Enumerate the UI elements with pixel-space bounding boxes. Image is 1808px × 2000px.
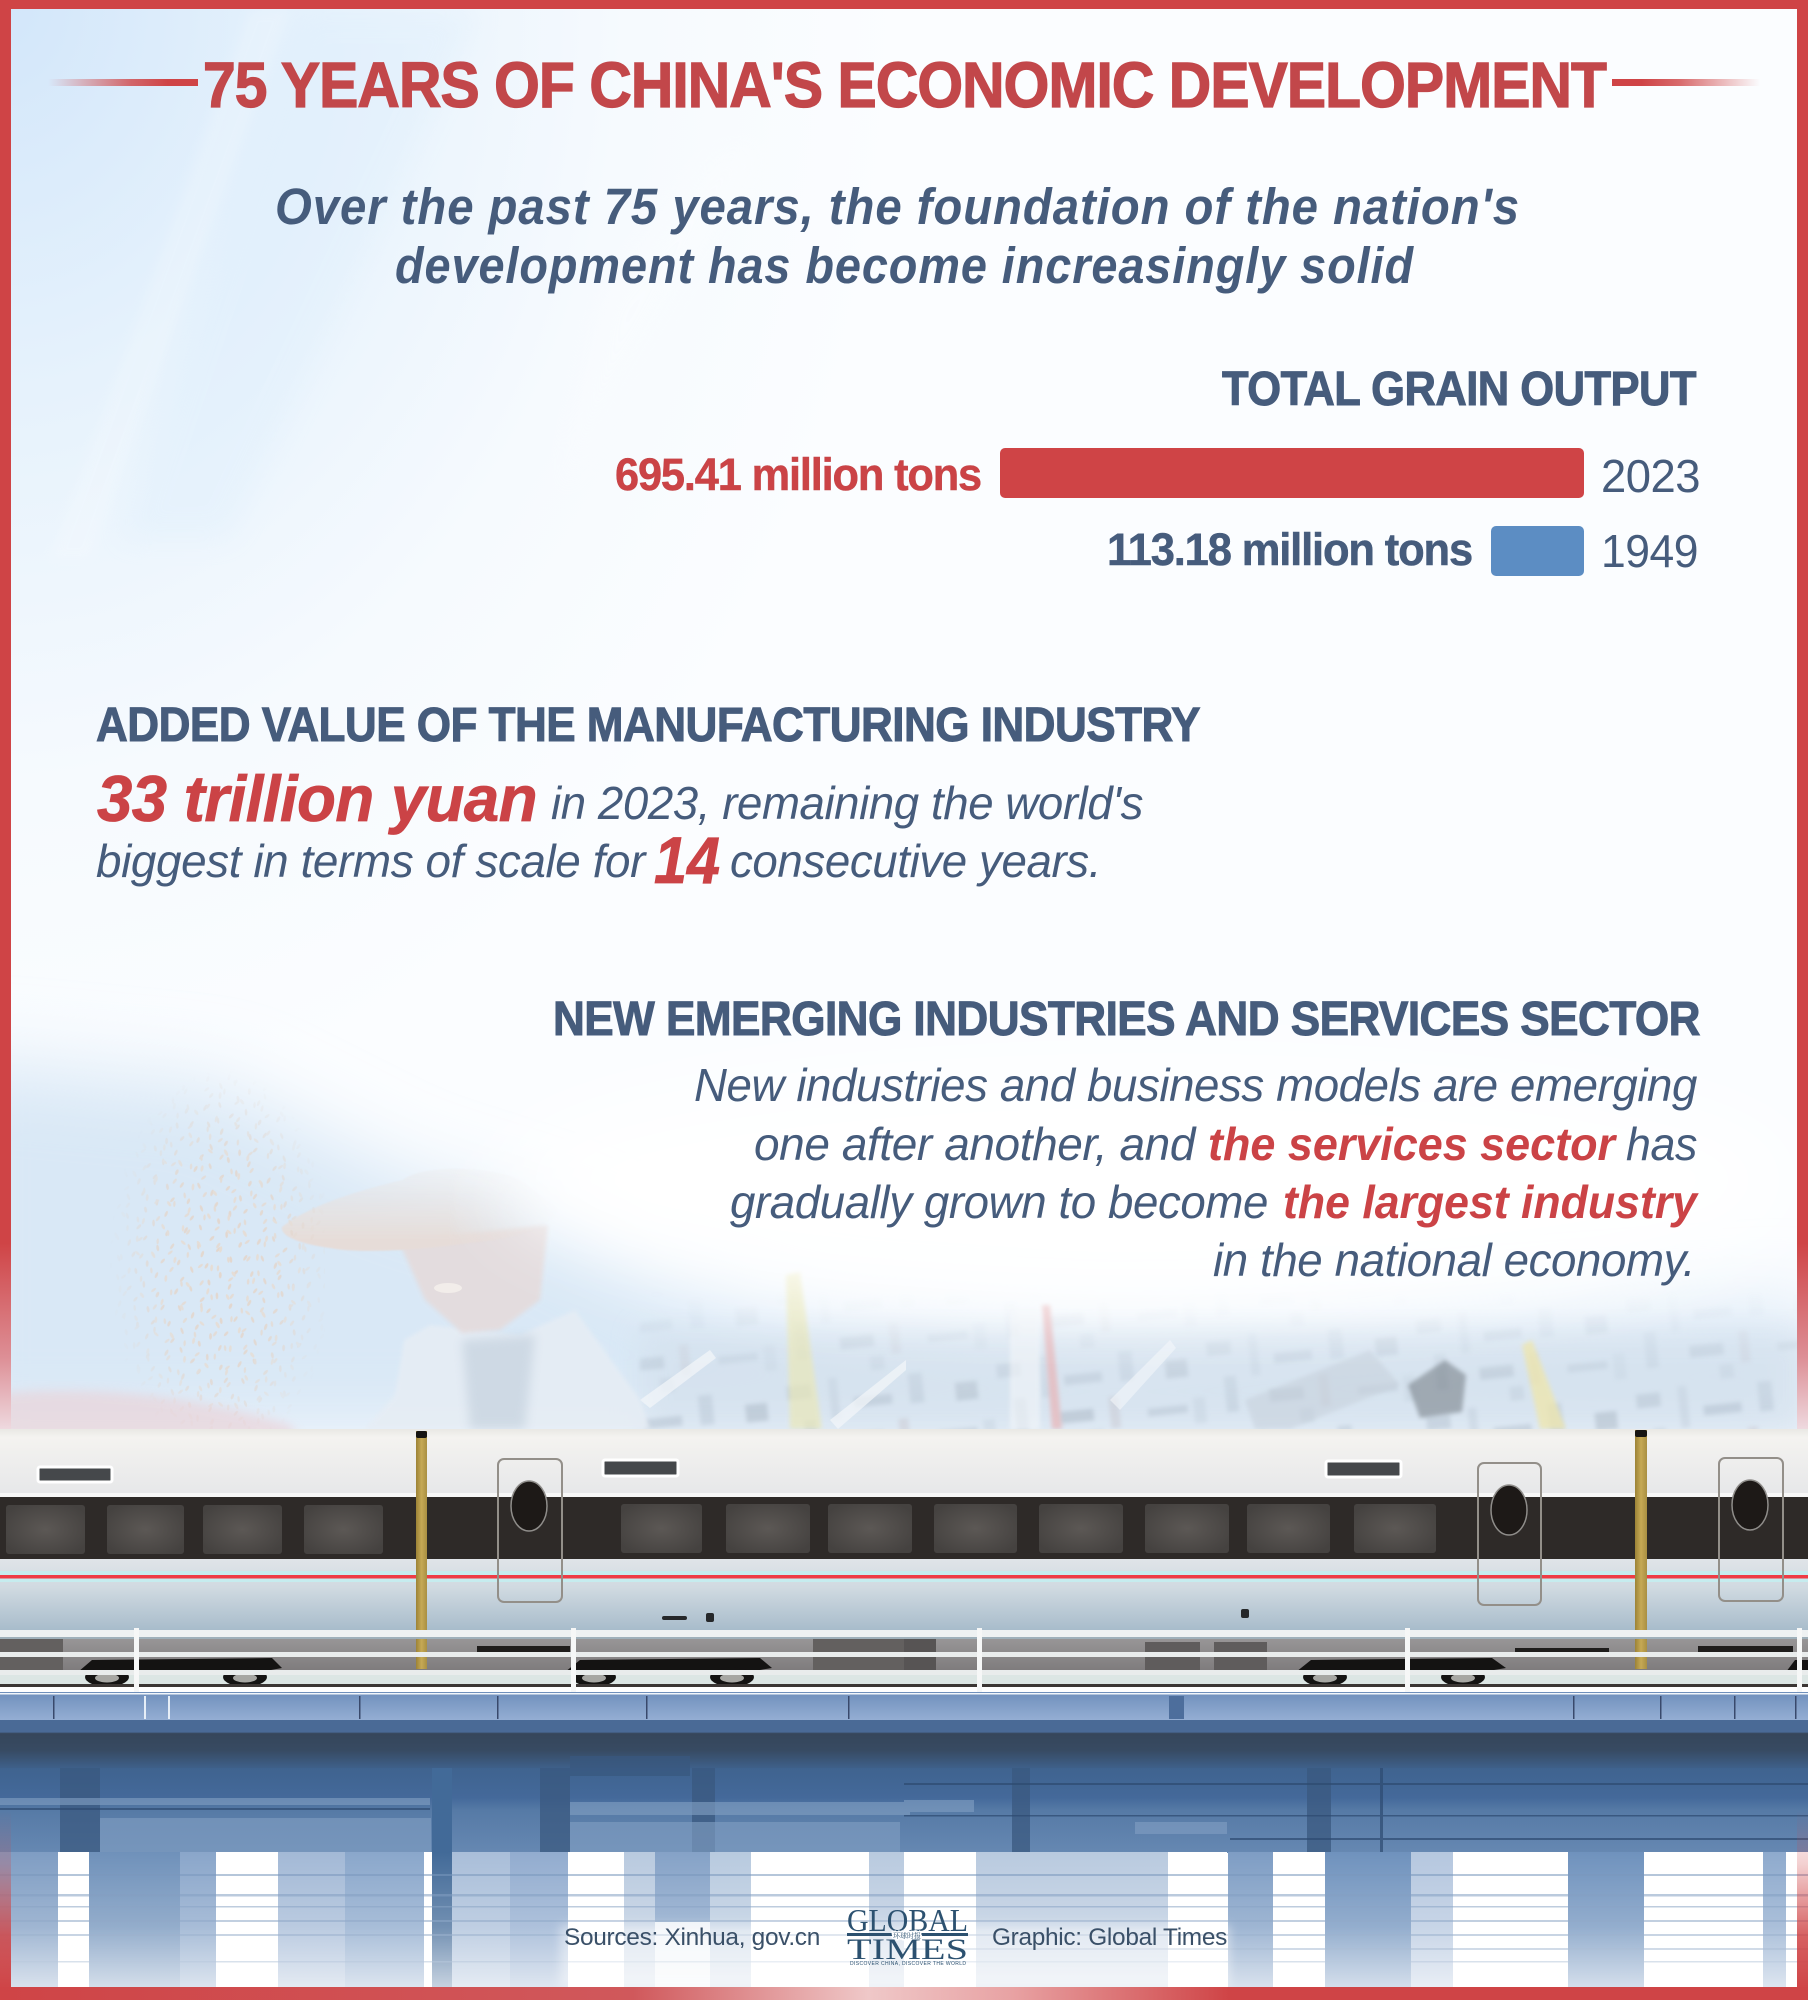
Global Times logo [847, 1902, 968, 1967]
manufacturing text line one: in 2023, remaining the world's [551, 777, 1143, 829]
services text line two: one after another, and [754, 1118, 1197, 1170]
gold poles [416, 1430, 1647, 1669]
big figure: 14: 14 [654, 823, 720, 897]
lower body [0, 1559, 1808, 1630]
light columns [0, 1768, 1808, 1987]
year label 1949: 1949 [1601, 525, 1698, 577]
chart heading: TOTAL GRAIN OUTPUT [1222, 363, 1696, 416]
high-speed train [0, 1429, 1808, 1692]
manufacturing heading: ADDED VALUE OF THE MANUFACTURING INDUSTRY [96, 699, 1201, 752]
manufacturing text line two end: consecutive years. [730, 835, 1101, 887]
doors [498, 1458, 1783, 1605]
title text: 75 YEARS OF CHINA'S ECONOMIC DEVELOPMENT [203, 49, 1607, 121]
bar 2023 [1000, 448, 1584, 498]
photo haze [0, 1060, 1808, 1440]
falling grain [124, 1087, 320, 1417]
services text line two: the services sector [1208, 1118, 1617, 1170]
panel: new emerging industries and services [553, 993, 1700, 1286]
roof vents [38, 1460, 1401, 1482]
sources: Sources: Xinhua, gov.cn [564, 1924, 820, 1951]
services text line three: the largest industry [1283, 1176, 1699, 1228]
services heading: NEW EMERGING INDUSTRIES AND SERVICES SECTOR [553, 993, 1700, 1046]
window band [0, 1497, 1808, 1559]
train roof [0, 1429, 1808, 1498]
footer: sources and logo [564, 1902, 1227, 1967]
year label 2023: 2023 [1601, 450, 1700, 502]
panel: manufacturing added value [96, 699, 1201, 897]
soft white cloud fade [530, 1202, 1052, 1332]
undercarriage [0, 1636, 1808, 1684]
Global Times logo: 环球时报 [893, 1931, 921, 1940]
services text line three: gradually grown to become [730, 1176, 1268, 1228]
blue structure [0, 1768, 1808, 1853]
services text line three [730, 1176, 1699, 1228]
title rule right [1612, 79, 1760, 86]
bogies [78, 1658, 1808, 1686]
value label 2023: 695.41 million tons [615, 449, 981, 500]
background photo: farmer winnowing grain and factory floor [0, 1050, 1808, 1440]
Global Times logo: DISCOVER CHINA, DISCOVER THE WORLD [850, 1961, 966, 1967]
body markers [662, 1609, 1249, 1622]
navy girder [0, 1720, 1808, 1770]
services text line two: has [1626, 1118, 1697, 1170]
subtitle: Over the past 75 years, the foundation of the nation's [275, 178, 1520, 235]
bar 1949 [1491, 526, 1584, 576]
Global Times logo: TIMES [847, 1933, 968, 1966]
big figure: 33 trillion yuan: 33 trillion yuan [97, 762, 537, 835]
subtitle: development has become increasingly solid [395, 237, 1415, 294]
services text line four: in the national economy. [1213, 1234, 1695, 1286]
services text line two [754, 1118, 1697, 1170]
title rule left [48, 79, 198, 86]
factory floor machinery [640, 1272, 1808, 1435]
value label 1949: 113.18 million tons [1107, 524, 1472, 575]
title with side rules [48, 49, 1760, 121]
windows [6, 1504, 1436, 1554]
services text line one: New industries and business models are emerging [694, 1059, 1698, 1111]
graphic credit: Graphic: Global Times [992, 1924, 1227, 1951]
farmer figure [282, 1169, 650, 1429]
manufacturing text line two: biggest in terms of scale for [96, 835, 647, 887]
panel: total grain output bar chart [615, 363, 1700, 577]
viaduct: blue bridge deck and reflected structure [0, 1692, 1808, 1987]
Global Times logo: GLOBAL [847, 1902, 968, 1938]
guard rails [0, 1628, 1808, 1692]
subtitle [275, 178, 1520, 294]
fade to white near footer [0, 1852, 1808, 1987]
bridge deck [0, 1692, 1808, 1720]
red grain heap [11, 1389, 294, 1429]
